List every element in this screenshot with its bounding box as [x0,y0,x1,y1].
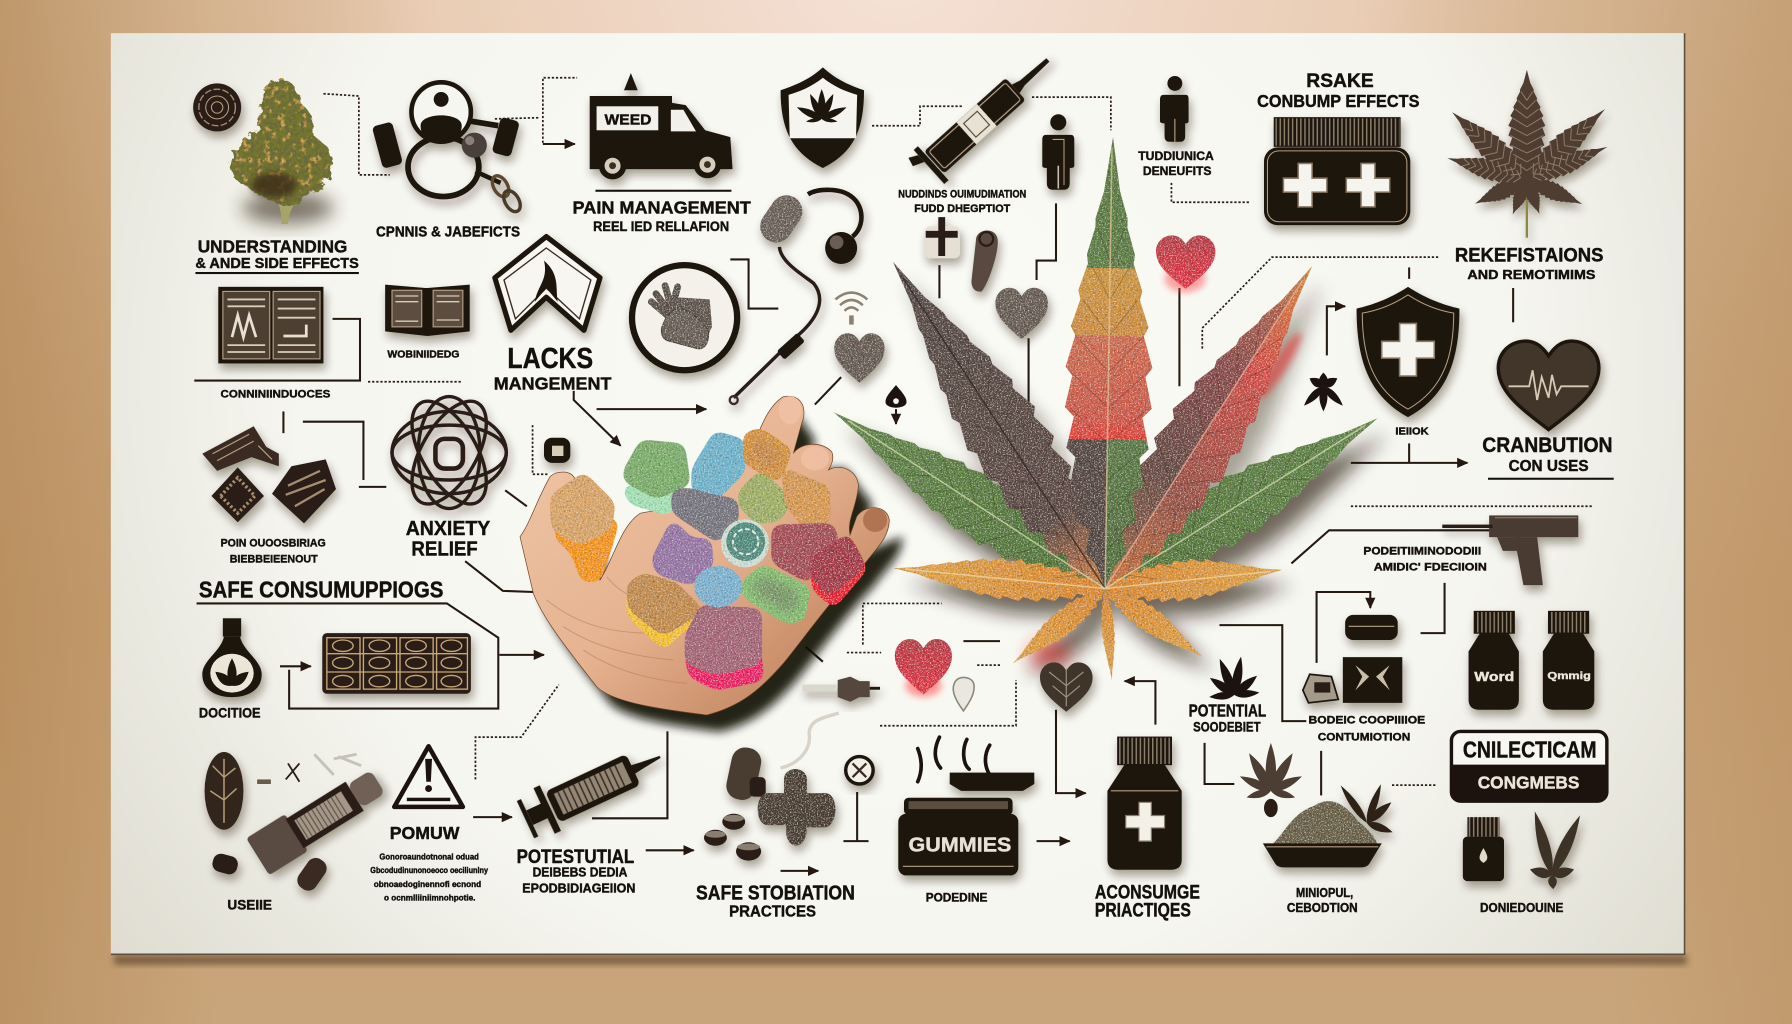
icon: gummies jar: GUMMIES [909,833,1011,856]
text: benefits caption: DENEUFITS [1143,164,1211,178]
icon: oval token [205,752,243,830]
heading: risk factors [1455,245,1603,282]
text: side caption top: NUDDINDS OUIMUDIMATION [898,189,1026,201]
text: warning block: o ocnmlliiniimnohpotie. [384,893,475,903]
heading: safe consumption: SAFE CONSUMUPPIOGS [199,577,443,603]
icon: coin [193,83,241,131]
icon: grey hearts [834,288,1048,383]
label: dosage: DOCITIOE [199,706,261,722]
heading: pain management: PAIN MANAGEMENT [573,198,751,218]
icon: key ring with person [372,82,524,214]
text: potential sediment [1189,701,1266,734]
text: pieces caption [221,537,326,565]
icon: gummy pieces dark [704,745,835,861]
heading: contribution: CON USES [1509,458,1589,475]
icon: droplet badge [886,385,906,424]
icon: heart with pulse [1498,341,1599,430]
heading: lacks management: MANGEMENT [494,373,612,393]
label: dosing: DONIEDOUINE [1480,900,1564,915]
text: potential side effects: POTESTUTIAL [517,846,634,868]
heading: safe storage: PRACTICES [729,904,816,921]
heading: lacks management: LACKS [507,343,593,375]
label: potency: PODEDINE [926,891,987,905]
decorative connector lines [194,78,1593,841]
icon: person one [1042,114,1074,190]
text: potential side effects: EPODBIDIAGEIION [522,882,635,896]
label: usage: USEIIE [227,898,272,913]
icon: cross badge [925,217,960,258]
label: risk: IEIIOK [1395,426,1429,437]
icon: delivery van [590,73,733,179]
text: dispenser caption: AMIDIC' FDECIIOIN [1374,561,1487,573]
heading: contribution: CRANBUTION [1482,432,1613,457]
text: benefits caption: TUDDIUNICA [1138,149,1214,163]
text: benefits caption [1138,149,1214,178]
text: warning block: obnoaedoginennofi ecnond [374,879,481,889]
icon: cross shield [1357,287,1459,417]
heading: understanding: & ANDE SIDE EFFECTS [195,256,359,272]
heading: understanding [195,237,359,274]
icon: open book small [385,285,470,336]
labels: books: WOBINIIDEDG [387,350,459,361]
icon: carved heart [1040,662,1093,712]
text: warning block: POMUW [390,823,460,843]
icon: open book large [218,287,323,363]
icon: red gummy heart lower [895,639,952,697]
icon: warning triangle [394,746,463,807]
callout: label box: CONGMEBS [1478,773,1579,793]
text: specific conditions [1309,714,1426,744]
text: potential side effects [517,846,635,896]
text: pieces caption: POIN OUOOSBIRIAG [221,537,326,549]
decorative small tools [257,754,361,784]
icon: twin bottles: Qmmig [1547,671,1591,682]
icon: delivery van: WEED [605,113,652,129]
icon: medicine bottle [1107,737,1182,870]
heading: anxiety relief [406,517,491,560]
text: warning block [370,823,488,903]
callout: label box [1451,731,1607,801]
heading: contribution [1482,432,1614,480]
labels: books [221,350,459,401]
icon: gummies jar [898,737,1034,875]
icon: paw circle [632,265,737,370]
icon: small plant [1301,373,1345,411]
heading: anxiety relief: ANXIETY [406,517,491,540]
icon: dropper [802,677,880,702]
heading: safe storage: SAFE STOBIATION [696,882,855,904]
text: specific conditions: CONTUMIOTION [1318,732,1410,744]
heading: safe storage [696,882,855,921]
text: potential side effects: DEIBEBS DEDIA [533,866,627,880]
icon: capsule, box and stone [1303,615,1402,703]
text: mindful consumption: CEBODTION [1287,901,1358,915]
icon: small leaf [1207,656,1260,701]
text: side caption top [898,189,1026,215]
icon: dark cannabis leaf [1443,70,1614,238]
image: hand holding gummies [520,396,903,732]
heading: anxiety relief: RELIEF [411,537,478,560]
icon: small token [544,438,570,463]
text: mindful consumption [1287,886,1358,915]
label: benefits: CPNNIS & JABEFICTS [376,225,520,241]
icon: leaf and seed [1238,743,1304,817]
heading: consumption practices: PRIACTIQES [1095,900,1191,922]
text: pieces caption: BIEBBEIEENOUT [230,553,318,565]
text: warning block: Gonoroaundotnonal oduad [379,851,479,861]
icon: pistol dispenser [1442,515,1578,585]
text: dispenser caption: PODEITIIMINODODIII [1363,545,1481,557]
text: mindful consumption: MINIOPUL, [1296,886,1353,900]
heading: understanding: UNDERSTANDING [198,237,347,257]
icon: glass droplet [953,677,974,711]
icon: grinder pen [246,763,389,875]
arrows [280,144,1467,871]
heading: safe consume effects: CONBUMP EFFECTS [1257,91,1419,111]
icon: person two [1160,76,1189,142]
icon: circle mark [846,757,873,784]
text: potential sediment: SOODEBIET [1193,719,1261,734]
text: potential sediment: POTENTIAL [1189,701,1266,721]
icon: leaf shield [781,67,864,168]
icon: loose pills [211,852,330,894]
heading: pain management: REEL IED RELLAFION [593,219,729,234]
icon: herb bowl [1263,783,1394,867]
heading: risk factors: REKEFISTAIONS [1455,245,1603,267]
icon: atom knot [392,389,506,516]
icon: wifi symbol [835,293,867,325]
heading: safe consume effects: RSAKE [1306,70,1374,92]
heading: consumption practices: ACONSUMGE [1095,881,1200,903]
text: specific conditions: BODEIC COOPIIIIOE [1309,714,1426,726]
icon: patterned pieces [202,426,336,523]
icon: first aid jar [1264,118,1410,225]
icon: dosage bottle [202,618,262,697]
chart figure: large gummy cannabis leaf [816,136,1406,689]
text: warning block: Gbcodudinunonoeoco oeciliunlny [370,865,488,875]
icon: small bottle and leaf [1463,810,1585,889]
icon: twin bottles [1469,611,1594,710]
icon: syringe lower [515,734,671,842]
icon: blister pack [322,633,471,694]
heading: consumption practices [1095,881,1200,922]
icon: microphone [971,231,998,292]
icon: headset [730,189,861,404]
icon: red gummy heart top [1156,235,1215,293]
heading: lacks management [494,343,612,393]
heading: risk factors: AND REMOTIMIMS [1467,267,1596,282]
text: side caption top: FUDD DHEGPTIOT [914,203,1010,215]
heading: pain management [573,190,751,234]
icon: syringe top [905,43,1063,192]
image: cannabis bud [229,80,334,224]
text: dispenser caption [1363,545,1487,573]
decorative wavy cord [781,713,839,768]
icon: house badge [495,237,600,330]
panel: poster sheet [111,33,1687,965]
icon: twin bottles: Word [1474,669,1514,684]
heading: safe consume effects [1257,70,1419,111]
labels: books: CONNINIINDUOCES [221,389,331,401]
callout: label box: CNILECTICAM [1463,737,1597,763]
